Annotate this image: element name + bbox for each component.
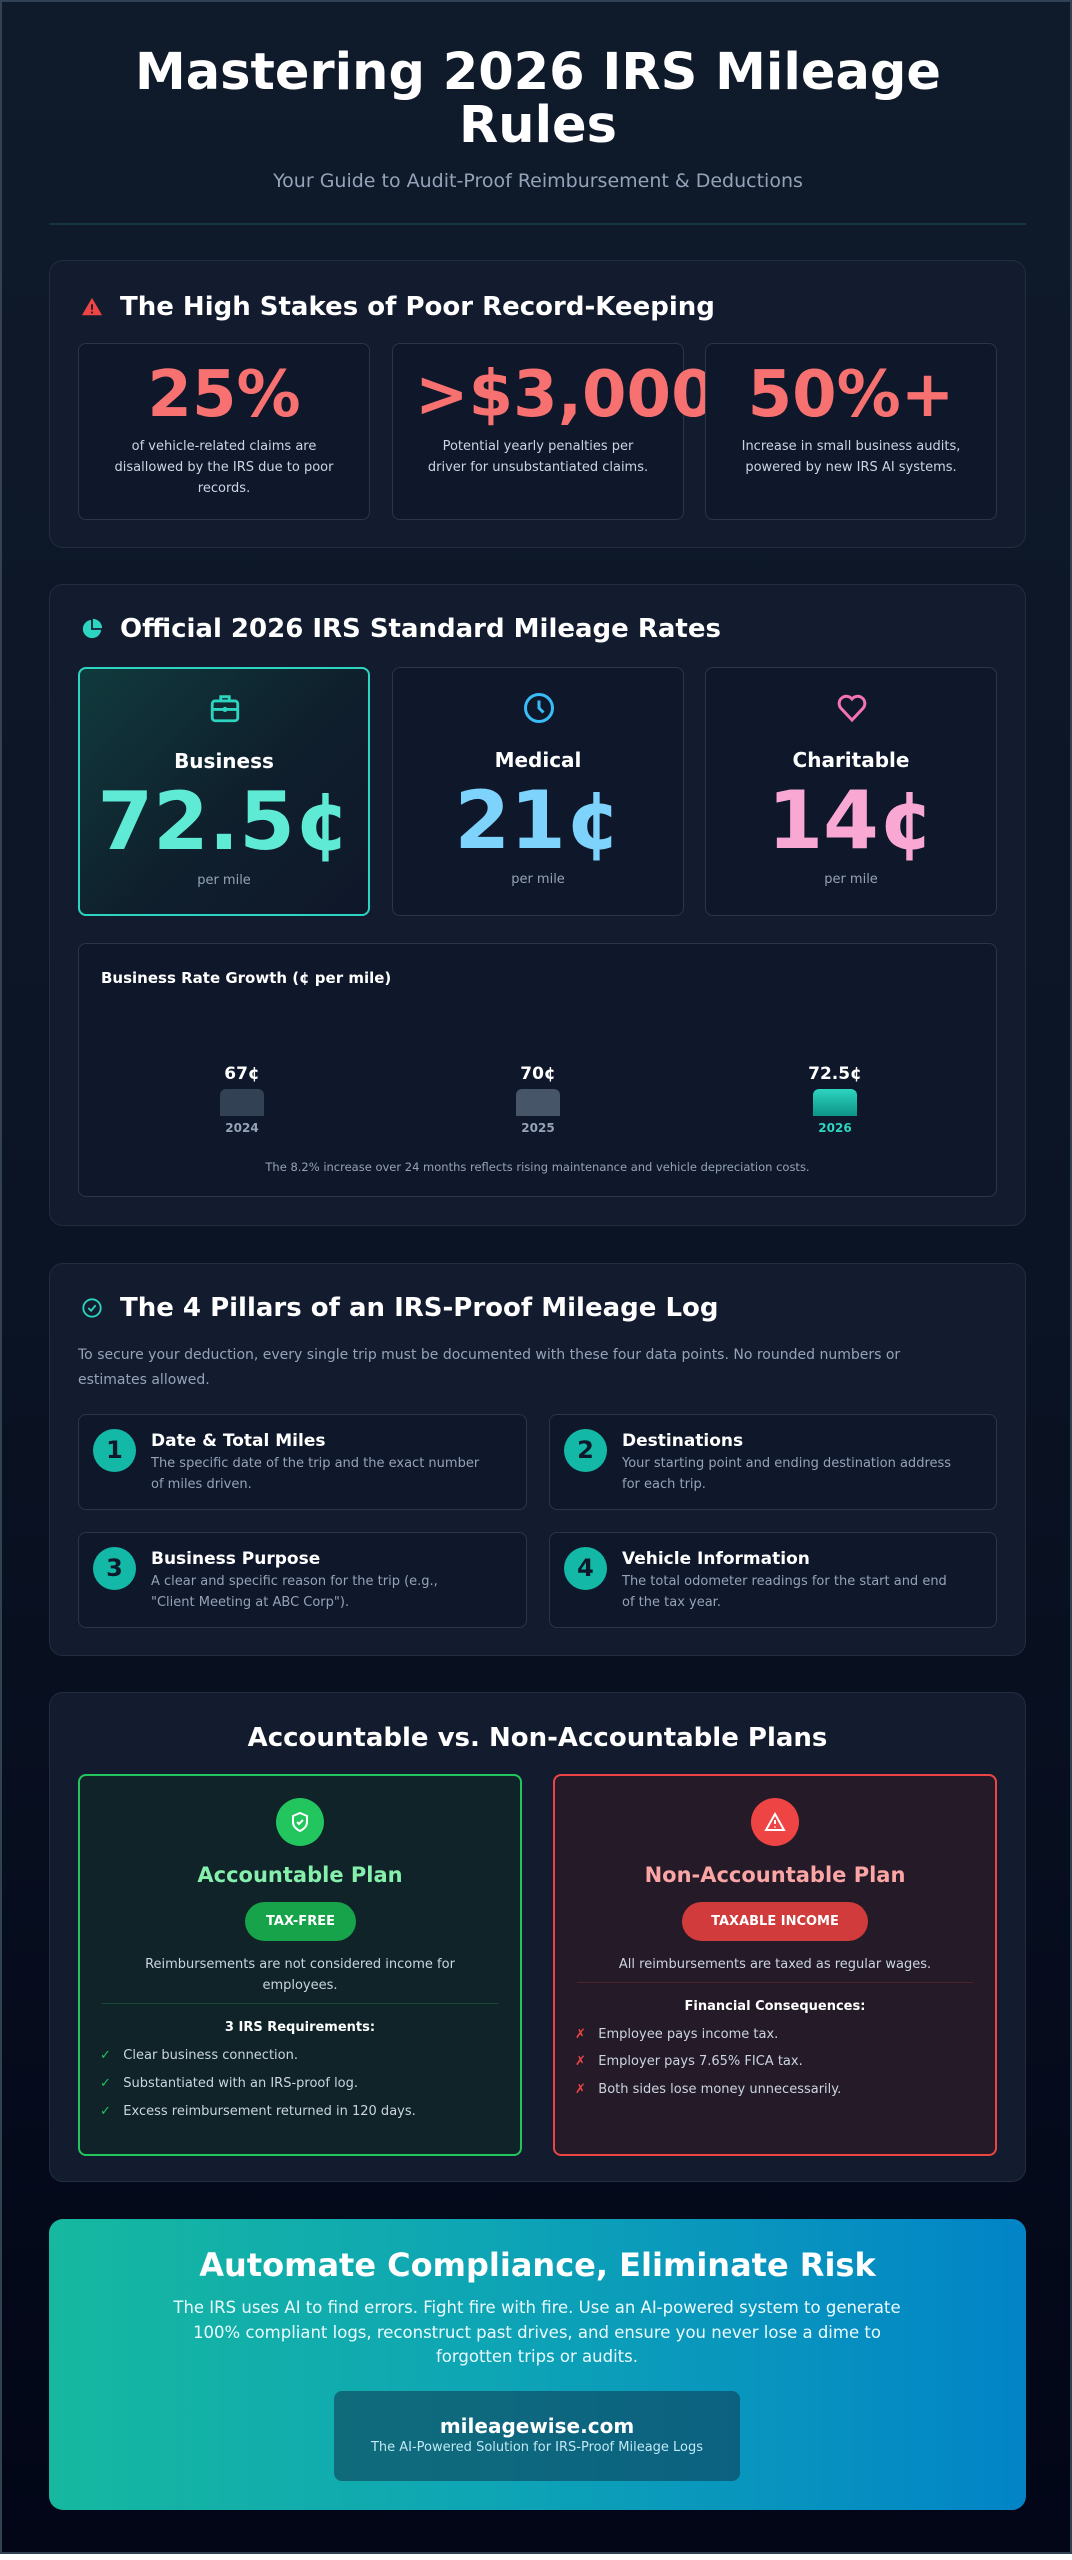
bar 2025 [516, 1064, 560, 1135]
icon: clock [524, 693, 554, 723]
bar 2025: 2025 [521, 1121, 555, 1135]
icon: warning [751, 1798, 799, 1846]
badge: TAXABLE INCOME [711, 1914, 839, 1929]
card: business: Business [174, 749, 274, 773]
icon: check circle [82, 1298, 102, 1318]
brand box [334, 2391, 740, 2481]
bar 2026 [808, 1064, 862, 1135]
heading: The High Stakes of Poor Record-Keeping [120, 292, 715, 322]
card: charitable: 14¢ [768, 774, 934, 867]
callout: CTA: 100% compliant logs, reconstruct past drives, and ensure you never lose a dime to [193, 2322, 881, 2342]
panel: plans comparison [49, 1692, 1026, 2182]
panel: high stakes [49, 260, 1026, 548]
pillar 4 [549, 1532, 997, 1628]
bar 2024: 67¢ [224, 1064, 260, 1084]
callout: CTA: The IRS uses AI to find errors. Fight fire with fire. Use an AI-powered system to generate [173, 2298, 901, 2317]
pillar 1: The specific date of the trip and the exact number of miles driven. [151, 1456, 479, 1492]
pillar 1: 1 [106, 1436, 123, 1464]
icon: pie [82, 618, 102, 638]
pillar 2: for each trip. [622, 1477, 706, 1492]
stat: $3000: >$3,000 [415, 358, 716, 432]
card: charitable [705, 667, 997, 916]
stat: $3000 [392, 343, 684, 520]
card: non-accountable: ✗ Both sides lose money unnecessarily. [575, 2082, 841, 2097]
bar 2025: 70¢ [520, 1064, 556, 1084]
heading: Accountable vs. Non-Accountable Plans [248, 1723, 827, 1753]
card: medical: Medical [495, 748, 581, 772]
bar chart: business rate growth [78, 943, 997, 1197]
stat: 25%: 25% [147, 358, 301, 432]
pillar 2: Your starting point and ending destination address [622, 1456, 951, 1471]
icon: heart [838, 694, 866, 722]
bar chart: business rate growth: Business Rate Growth (¢ per mile) [101, 969, 391, 987]
badge [245, 1902, 356, 1941]
card: accountable: ✓ Excess reimbursement returned in 120 days. [100, 2104, 416, 2119]
stat: 50%: Increase in small business audits, powered by new IRS AI systems. [742, 439, 960, 475]
title [135, 43, 941, 155]
pillar 2: Destinations [622, 1431, 743, 1451]
brand box: The AI-Powered Solution for IRS-Proof Mileage Logs [371, 2440, 703, 2455]
title: Rules [459, 96, 617, 155]
title: Mastering 2026 IRS Mileage [135, 43, 941, 102]
card: accountable: ✓ Clear business connection. [100, 2048, 298, 2063]
pillar 2: 2 [577, 1436, 594, 1464]
card: business [78, 667, 370, 916]
pillar 3 [78, 1532, 527, 1628]
icon: briefcase [210, 695, 240, 722]
card: accountable: Reimbursements are not considered income for employees. [145, 1957, 455, 1993]
subtitle: Your Guide to Audit-Proof Reimbursement & Deductions [273, 170, 803, 192]
footnote: The 8.2% increase over 24 months reflects rising maintenance and vehicle depreciation costs. [265, 1160, 810, 1174]
stat: 50%: 50%+ [748, 358, 954, 432]
card: accountable [78, 1774, 522, 2156]
card: accountable: 3 IRS Requirements: [225, 2020, 375, 2035]
pillar 3: 3 [106, 1554, 123, 1582]
bar 2026: 2026 [818, 1121, 852, 1135]
pillar 4: The total odometer readings for the start and end of the tax year. [622, 1574, 947, 1610]
pillar 3: "Client Meeting at ABC Corp"). [151, 1595, 349, 1610]
stat: 25%: of vehicle-related claims are disallowed by the IRS due to poor records. [115, 439, 333, 496]
badge [682, 1902, 868, 1941]
card: business: per mile [197, 873, 251, 888]
callout: CTA: forgotten trips or audits. [436, 2347, 638, 2366]
card: non-accountable: Non-Accountable Plan [645, 1863, 905, 1887]
card: non-accountable: ✗ Employee pays income tax. [575, 2027, 778, 2042]
pillar 3: A clear and specific reason for the trip (e.g., [151, 1574, 438, 1589]
intro text: To secure your deduction, every single trip must be documented with these four data points. No rounded numbers or estimates allowed. [78, 1347, 900, 1388]
card: non-accountable: ✗ Employer pays 7.65% FICA tax. [575, 2054, 803, 2069]
card: medical [392, 667, 684, 916]
brand box: mileagewise.com [440, 2414, 634, 2438]
card: accountable: ✓ Substantiated with an IRS-proof log. [100, 2076, 358, 2091]
card: non-accountable [553, 1774, 997, 2156]
pillar 2 [549, 1414, 997, 1510]
heading: Official 2026 IRS Standard Mileage Rates [120, 614, 721, 644]
badge: TAX-FREE [266, 1914, 335, 1929]
panel: rates [49, 584, 1026, 1226]
pillar 4: Vehicle Information [622, 1549, 810, 1569]
card: charitable: Charitable [793, 748, 909, 772]
heading: The 4 Pillars of an IRS-Proof Mileage Log [120, 1293, 718, 1323]
pillar 4: 4 [577, 1554, 594, 1582]
card: medical: per mile [511, 872, 565, 887]
pillar 1: Date & Total Miles [151, 1431, 325, 1451]
stat: 50% [705, 343, 997, 520]
callout: CTA [49, 2219, 1026, 2510]
card: non-accountable: Financial Consequences: [685, 1999, 865, 2014]
card: accountable: Accountable Plan [197, 1863, 403, 1887]
bar 2024: 2024 [225, 1121, 259, 1135]
pillar 3: Business Purpose [151, 1549, 320, 1569]
icon: warning [82, 298, 102, 316]
bar 2026: 72.5¢ [808, 1064, 862, 1084]
bar 2024 [220, 1064, 264, 1135]
stat: $3000: Potential yearly penalties per driver for unsubstantiated claims. [428, 439, 648, 475]
card: medical: 21¢ [454, 774, 622, 867]
callout: CTA: Automate Compliance, Eliminate Risk [199, 2246, 876, 2284]
card: non-accountable: All reimbursements are taxed as regular wages. [619, 1957, 931, 1972]
icon: shield [276, 1798, 324, 1846]
card: business: 72.5¢ [97, 775, 351, 868]
pillar 1 [78, 1414, 527, 1510]
panel: 4 pillars [49, 1263, 1026, 1656]
card: charitable: per mile [824, 872, 878, 887]
stat: 25% [78, 343, 370, 520]
